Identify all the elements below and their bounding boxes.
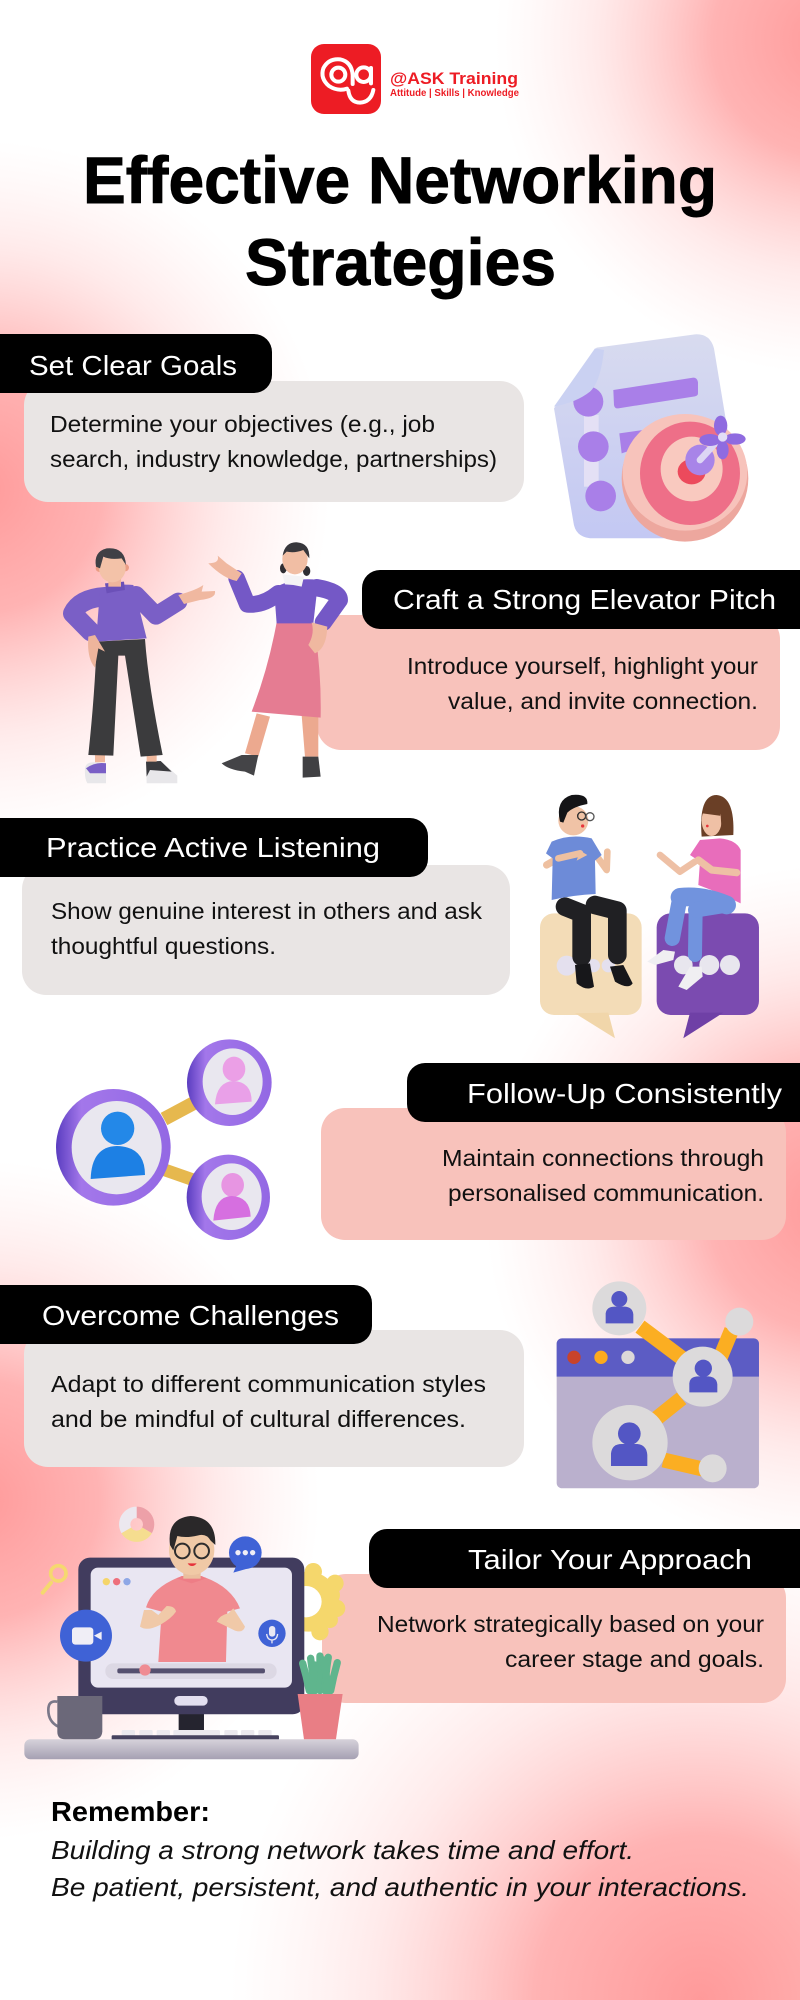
icon: microphone: [258, 1620, 286, 1647]
heading bar: follow-up: Follow-Up Consistently: [467, 1078, 782, 1109]
heading bar: set clear goals: [0, 334, 272, 393]
text box: set clear goals: search, industry knowledge, partnerships): [50, 446, 497, 472]
logo: @ASK Training: [390, 69, 518, 88]
closing note: Remember:: [51, 1796, 210, 1827]
icon: browser window with people nodes: [557, 1281, 759, 1488]
heading bar: set clear goals: Set Clear Goals: [29, 350, 237, 381]
heading bar: elevator pitch: [362, 570, 800, 629]
text box: overcome challenges: Adapt to different communication styles: [51, 1371, 486, 1397]
icon: magnifier: [43, 1566, 66, 1593]
text box: tailor your approach: Network strategically based on your: [377, 1611, 764, 1637]
text box: follow-up: Maintain connections through: [442, 1145, 764, 1171]
panel: tailor your approach: [24, 1512, 800, 1759]
node: bottom contact: [187, 1155, 270, 1240]
monitor: [78, 1558, 304, 1731]
text box: tailor your approach: career stage and goals.: [505, 1646, 764, 1672]
heading bar: overcome challenges: [0, 1285, 372, 1344]
text box: set clear goals: [24, 381, 524, 502]
text box: overcome challenges: [24, 1330, 524, 1467]
text box: follow-up: [321, 1108, 786, 1240]
icon: camera: [60, 1610, 112, 1662]
man sitting: [546, 795, 633, 989]
panel: overcome challenges: [0, 1281, 759, 1488]
heading bar: overcome challenges: Overcome Challenges: [42, 1300, 339, 1331]
illustration: presenter on desktop monitor: [24, 1512, 359, 1759]
icon: connected people network: [56, 1039, 272, 1240]
text box: follow-up: personalised communication.: [448, 1180, 764, 1206]
panel: set clear goals: [0, 334, 748, 542]
text box: active listening: Show genuine interest in others and ask: [51, 898, 482, 924]
cream speech bubble: [540, 913, 642, 1038]
text box: elevator pitch: [317, 615, 780, 750]
woman sitting: [647, 795, 741, 990]
plant: [298, 1656, 343, 1739]
video slider: [105, 1663, 277, 1679]
woman: [208, 542, 339, 778]
purple speech bubble: [657, 913, 759, 1038]
illustration: man and woman talking: [73, 542, 339, 783]
text box: tailor your approach: [322, 1574, 786, 1703]
gear: [278, 1563, 345, 1640]
man: [73, 548, 215, 783]
icon: donut chart: [125, 1512, 149, 1536]
mug: [48, 1696, 102, 1739]
panel: craft a strong elevator pitch: [73, 542, 800, 783]
heading bar: active listening: [0, 818, 428, 877]
node: top contact: [187, 1039, 272, 1126]
text box: set clear goals: Determine your objectives (e.g., job: [50, 411, 435, 437]
logo: [311, 44, 519, 114]
heading bar: tailor your approach: Tailor Your Approach: [468, 1544, 752, 1575]
logo: Attitude | Skills | Knowledge: [390, 88, 519, 99]
text box: active listening: thoughtful questions.: [51, 933, 276, 959]
node: main person: [56, 1089, 171, 1206]
heading bar: tailor your approach: [369, 1529, 800, 1588]
icon: document with target: [554, 334, 748, 542]
desk with keyboard: [24, 1730, 359, 1759]
closing note: [51, 1796, 749, 1902]
text box: elevator pitch: Introduce yourself, highlight your: [407, 653, 758, 679]
title: Effective Networking: [83, 143, 717, 217]
text box: active listening: [22, 865, 510, 995]
heading bar: active listening: Practice Active Listening: [46, 832, 380, 863]
title: [83, 143, 717, 299]
illustration: two people on speech bubbles: [540, 795, 759, 1038]
presenter: [140, 1516, 245, 1662]
title: Strategies: [245, 225, 556, 299]
icon: chat bubble: [229, 1536, 262, 1573]
heading bar: elevator pitch: Craft a Strong Elevator Pitch: [393, 584, 776, 615]
panel: practice active listening: [0, 795, 759, 1038]
text box: overcome challenges: and be mindful of cultural differences.: [51, 1406, 466, 1432]
heading bar: follow-up: [407, 1063, 800, 1122]
panel: follow-up consistently: [56, 1039, 800, 1240]
text box: elevator pitch: value, and invite connection.: [448, 688, 758, 714]
closing note: Building a strong network takes time and effort.: [51, 1835, 634, 1865]
closing note: Be patient, persistent, and authentic in your interactions.: [51, 1872, 749, 1902]
